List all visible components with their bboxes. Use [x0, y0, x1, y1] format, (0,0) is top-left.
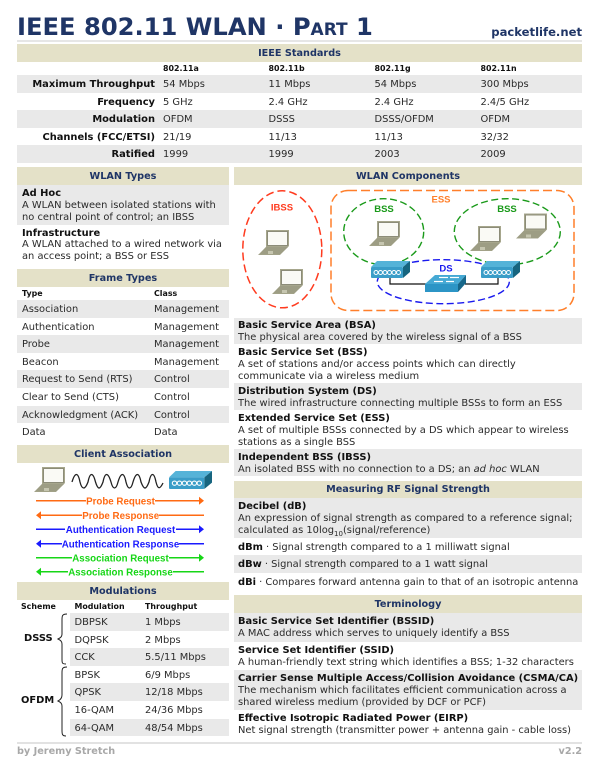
- wired links: [390, 277, 498, 284]
- modulation row: 64-QAM: [74, 723, 114, 734]
- definition: ESS: A set of multiple BSSs connected by a DS which appear to wireless: [238, 425, 569, 436]
- modulation row: 2 Mbps: [145, 635, 181, 646]
- title: IEEE 802.11 WLAN · Part 1: [17, 13, 373, 41]
- frame row: Control: [154, 392, 190, 403]
- text: Infrastructure: an access point; a BSS or ESS: [22, 251, 169, 262]
- definition: dBi: dBi · Compares forward antenna gain to that of an isotropic antenna: [238, 577, 578, 588]
- row: Channels: Channels (FCC/ETSI): [42, 132, 155, 143]
- arrow: Probe Request: [36, 496, 204, 508]
- icon: laptop: [272, 269, 303, 294]
- row: Frequency: Frequency: [97, 97, 155, 108]
- definition: ESS: [238, 413, 569, 448]
- row: Modulation: [17, 110, 582, 128]
- definition: dBw: [234, 555, 582, 573]
- definition: BSS: Basic Service Set (BSS): [238, 347, 368, 358]
- text: Ad Hoc: no central point of control; an IBSS: [22, 212, 194, 223]
- row: Maximum Throughput: [17, 75, 582, 93]
- diagram: WLAN components: [242, 190, 575, 312]
- heading: WLAN Components: WLAN Components: [356, 171, 460, 182]
- heading: Client Association: [17, 445, 229, 463]
- definition: SSID: A human-friendly text string which identifies a BSS; 1-32 characters: [238, 657, 574, 668]
- row: Maximum Throughput: 54 Mbps: [374, 79, 416, 90]
- text: Ad Hoc: A WLAN between isolated stations with: [22, 200, 216, 211]
- frame row: Management: [154, 339, 219, 350]
- definition: BSS: communicate via a wireless medium: [238, 371, 419, 382]
- definition: ESS: Extended Service Set (ESS): [238, 413, 390, 424]
- modulation row: DBPSK: [74, 617, 108, 628]
- panel: IEEE Standards: [17, 44, 582, 163]
- arrow: Authentication Response: [36, 540, 204, 550]
- definition: Decibel: An expression of signal strength as compared to a reference signal;: [238, 513, 572, 524]
- footer: version: v2.2: [559, 746, 582, 757]
- text: Infrastructure: A WLAN attached to a wired network via: [22, 239, 222, 250]
- heading: Modulations: Modulations: [89, 586, 157, 597]
- arrow: Association Request: [36, 554, 204, 564]
- row: Frequency: 2.4/5 GHz: [480, 97, 529, 108]
- modulation row: 1 Mbps: [145, 617, 181, 628]
- table: Frame Types: [17, 289, 229, 438]
- definition: EIRP: [238, 713, 571, 736]
- definition: SSID: [238, 645, 574, 668]
- heading: IEEE Standards: IEEE Standards: [258, 48, 341, 59]
- definition: dBw: dBw · Signal strength compared to a 1 watt signal: [238, 559, 488, 570]
- modulation row: BPSK: [74, 670, 100, 681]
- definition: BSS: A set of stations and/or access points which can directly: [238, 359, 516, 370]
- definition: IBSS: [234, 449, 582, 476]
- row: Channels: 11/13: [268, 132, 297, 143]
- row: Modulation: Modulation: [92, 114, 155, 125]
- diagram: client association: [34, 467, 212, 578]
- row: Frequency: 2.4 GHz: [268, 97, 308, 108]
- definition: CSMA/CA: Carrier Sense Multiple Access/Collision Avoidance (CSMA/CA): [238, 673, 578, 684]
- text: Ad Hoc: Ad Hoc: [22, 188, 61, 199]
- frame row: Authentication: [22, 322, 94, 333]
- definition: BSA: The physical area covered by the wireless signal of a BSS: [238, 332, 522, 343]
- icon: laptop: [516, 214, 547, 238]
- definition: SSID: Service Set Identifier (SSID): [238, 645, 394, 656]
- heading: Frame Types: Frame Types: [89, 273, 157, 284]
- heading: Terminology: Terminology: [375, 599, 441, 610]
- definition: Decibel: [234, 498, 582, 538]
- definition: CSMA/CA: [234, 670, 582, 710]
- row: Modulation: OFDM: [480, 114, 510, 125]
- row: Channels: [42, 132, 509, 143]
- definition: ESS: stations as a single BSS: [238, 437, 355, 448]
- modulation row: [74, 635, 181, 646]
- frame row: Data: [22, 427, 46, 438]
- modulation row: 5.5/11 Mbps: [145, 652, 206, 663]
- row: Channels: 11/13: [374, 132, 403, 143]
- modulation row: CCK: [74, 652, 95, 663]
- BSS ellipse left: [344, 199, 424, 265]
- heading: Measuring RF Signal Strength: [234, 481, 582, 498]
- frame row: Clear to Send (CTS): [22, 392, 119, 403]
- modulation row: [74, 705, 203, 716]
- heading: WLAN Types: WLAN Types: [90, 171, 156, 182]
- arrow: Association Request: Association Request: [72, 554, 169, 564]
- icon: access point: [169, 471, 212, 489]
- modulation row: [70, 648, 229, 666]
- frame row: [22, 322, 219, 333]
- frame row: Management: [154, 357, 219, 368]
- table: Modulations: [21, 602, 229, 736]
- heading: Frame Types: [17, 269, 229, 287]
- row: Maximum Throughput: Maximum Throughput: [32, 79, 155, 90]
- modulation row: QPSK: [74, 687, 101, 698]
- definition: BSS: [238, 347, 516, 382]
- brace: OFDM: [57, 666, 67, 736]
- heading: WLAN Components: [234, 167, 582, 185]
- IBSS ellipse: [243, 191, 322, 308]
- modulation row: [70, 683, 229, 701]
- row: Modulation: DSSS/OFDM: [374, 114, 434, 125]
- ESS boundary: [331, 190, 574, 310]
- row: Modulation: OFDM: [163, 114, 193, 125]
- column headers: 802.11g: [374, 64, 411, 73]
- modulation row: 16-QAM: [74, 705, 114, 716]
- arrow: Association Response: [36, 568, 204, 578]
- definition: Decibel: Decibel (dB): [238, 501, 306, 512]
- definition: Decibel: calculated as 10log10(signal/reference): [238, 525, 430, 538]
- arrow: Authentication Request: [36, 525, 204, 536]
- text: Infrastructure: [22, 228, 222, 262]
- arrow: Probe Response: Probe Response: [82, 511, 160, 522]
- modulation row: 48/54 Mbps: [145, 723, 203, 734]
- definition: BSA: Basic Service Area (BSA): [238, 320, 376, 331]
- heading: Terminology: [234, 595, 582, 613]
- definition: DS: The wired infrastructure connecting multiple BSSs to form an ESS: [238, 398, 562, 409]
- frame row: Data: [154, 427, 178, 438]
- modulation row: DQPSK: [74, 635, 109, 646]
- row: Ratified: 2003: [374, 149, 400, 160]
- icon: laptop: [470, 226, 501, 251]
- website: packetlife.net: [491, 25, 582, 39]
- definition: EIRP: Effective Isotropic Radiated Power (EIRP): [238, 713, 468, 724]
- DS ellipse: [377, 260, 509, 304]
- frame row: Management: [154, 322, 219, 333]
- frame row: Management: [154, 304, 219, 315]
- icon: laptop: [369, 221, 400, 246]
- column headers: [22, 289, 177, 298]
- row: Maximum Throughput: 11 Mbps: [268, 79, 310, 90]
- frame row: Association: [22, 304, 78, 315]
- icon: laptop: [34, 467, 65, 492]
- heading: Client Association: Client Association: [74, 449, 172, 460]
- icon: access point right: [481, 261, 520, 278]
- row: Ratified: 2009: [480, 149, 506, 160]
- row: Ratified: Ratified: [112, 149, 155, 160]
- heading: IEEE Standards: [17, 44, 582, 62]
- icon: switch: [425, 275, 466, 292]
- column headers: 802.11n: [480, 64, 517, 73]
- column headers: 802.11b: [268, 64, 305, 73]
- BSS ellipse right: BSS: [497, 204, 517, 215]
- arrow: Probe Response: [36, 511, 204, 522]
- frame row: [17, 335, 229, 353]
- column headers: Throughput: [145, 602, 197, 611]
- ESS boundary: ESS: [431, 194, 451, 206]
- label: OFDM: OFDM: [21, 695, 54, 706]
- icon: laptop: [258, 230, 289, 255]
- row: Ratified: 1999: [163, 149, 188, 160]
- frame row: Control: [154, 374, 190, 385]
- icon: access point left: [371, 261, 410, 278]
- frame row: Probe: [22, 339, 50, 350]
- row: Maximum Throughput: 300 Mbps: [480, 79, 529, 90]
- BSS ellipse left: BSS: [374, 204, 394, 215]
- row: Frequency: 2.4 GHz: [374, 97, 414, 108]
- brace: DSSS: [57, 614, 67, 664]
- DS ellipse: DS: [439, 264, 453, 274]
- arrow: Association Response: Association Response: [68, 568, 173, 578]
- definition: IBSS: An isolated BSS with no connection to a DS; an ad hoc WLAN: [238, 464, 540, 475]
- row: Modulation: DSSS: [268, 114, 295, 125]
- row: Frequency: [97, 97, 529, 108]
- column headers: Scheme: [21, 602, 56, 611]
- definition: BSSID: Basic Service Set Identifier (BSSID): [238, 616, 434, 627]
- definition: DS: [234, 383, 582, 410]
- frame row: [22, 427, 178, 438]
- column headers: Modulation: [74, 602, 125, 611]
- definition: BSA: [234, 318, 582, 344]
- row: Ratified: 1999: [268, 149, 294, 160]
- BSS ellipse right: [454, 199, 560, 265]
- modulation row: [70, 719, 229, 736]
- frame row: [17, 406, 229, 423]
- modulation row: 12/18 Mbps: [145, 687, 203, 698]
- frame row: [17, 370, 229, 388]
- arrow: Probe Request: Probe Request: [86, 496, 156, 508]
- definition: BSSID: [234, 613, 582, 642]
- modulation row: 24/36 Mbps: [145, 705, 203, 716]
- IBSS ellipse: IBSS: [271, 202, 293, 214]
- wireless wave: [72, 474, 163, 488]
- frame row: [17, 300, 229, 318]
- frame row: [22, 357, 219, 368]
- definition: dBm: dBm · Signal strength compared to a 1 milliwatt signal: [238, 542, 510, 553]
- frame row: Beacon: [22, 357, 59, 368]
- column headers: Type: [22, 289, 43, 298]
- modulation row: [74, 670, 190, 681]
- column headers: [21, 602, 198, 611]
- row: Frequency: 5 GHz: [163, 97, 193, 108]
- frame row: Control: [154, 410, 190, 421]
- frame row: Acknowledgment (ACK): [22, 410, 138, 421]
- definition: CSMA/CA: shared wireless medium (provided by DCF or PCF): [238, 697, 486, 708]
- row: Maximum Throughput: 54 Mbps: [163, 79, 205, 90]
- arrow: Authentication Response: Authentication Response: [62, 540, 180, 550]
- row: Ratified: [17, 145, 582, 163]
- row: Channels: 32/32: [480, 132, 509, 143]
- text: Ad Hoc: [17, 185, 229, 225]
- column headers: 802.11a: [163, 64, 199, 73]
- row: Channels: 21/19: [163, 132, 191, 143]
- definition: IBSS: Independent BSS (IBSS): [238, 452, 371, 463]
- heading: WLAN Types: [17, 167, 229, 185]
- frame row: [22, 392, 190, 403]
- text: Infrastructure: Infrastructure: [22, 228, 100, 238]
- modulation row: 6/9 Mbps: [145, 670, 190, 681]
- column headers: Class: [154, 289, 177, 298]
- footer: author: by Jeremy Stretch: [17, 746, 115, 757]
- heading: Modulations: [17, 582, 229, 600]
- label: DSSS: DSSS: [24, 633, 53, 644]
- modulation row: [70, 613, 229, 631]
- definition: CSMA/CA: The mechanism which facilitates efficient communication across a: [238, 685, 567, 696]
- column headers: [163, 64, 517, 73]
- definition: EIRP: Net signal strength (transmitter power + antenna gain - cable loss): [238, 725, 571, 736]
- arrow: Authentication Request: Authentication Request: [66, 525, 176, 536]
- definition: DS: Distribution System (DS): [238, 386, 377, 397]
- frame row: Request to Send (RTS): [22, 374, 132, 385]
- definition: BSSID: A MAC address which serves to uniquely identify a BSS: [238, 628, 510, 639]
- heading: Measuring RF Signal Strength: Measuring RF Signal Strength: [326, 484, 490, 495]
